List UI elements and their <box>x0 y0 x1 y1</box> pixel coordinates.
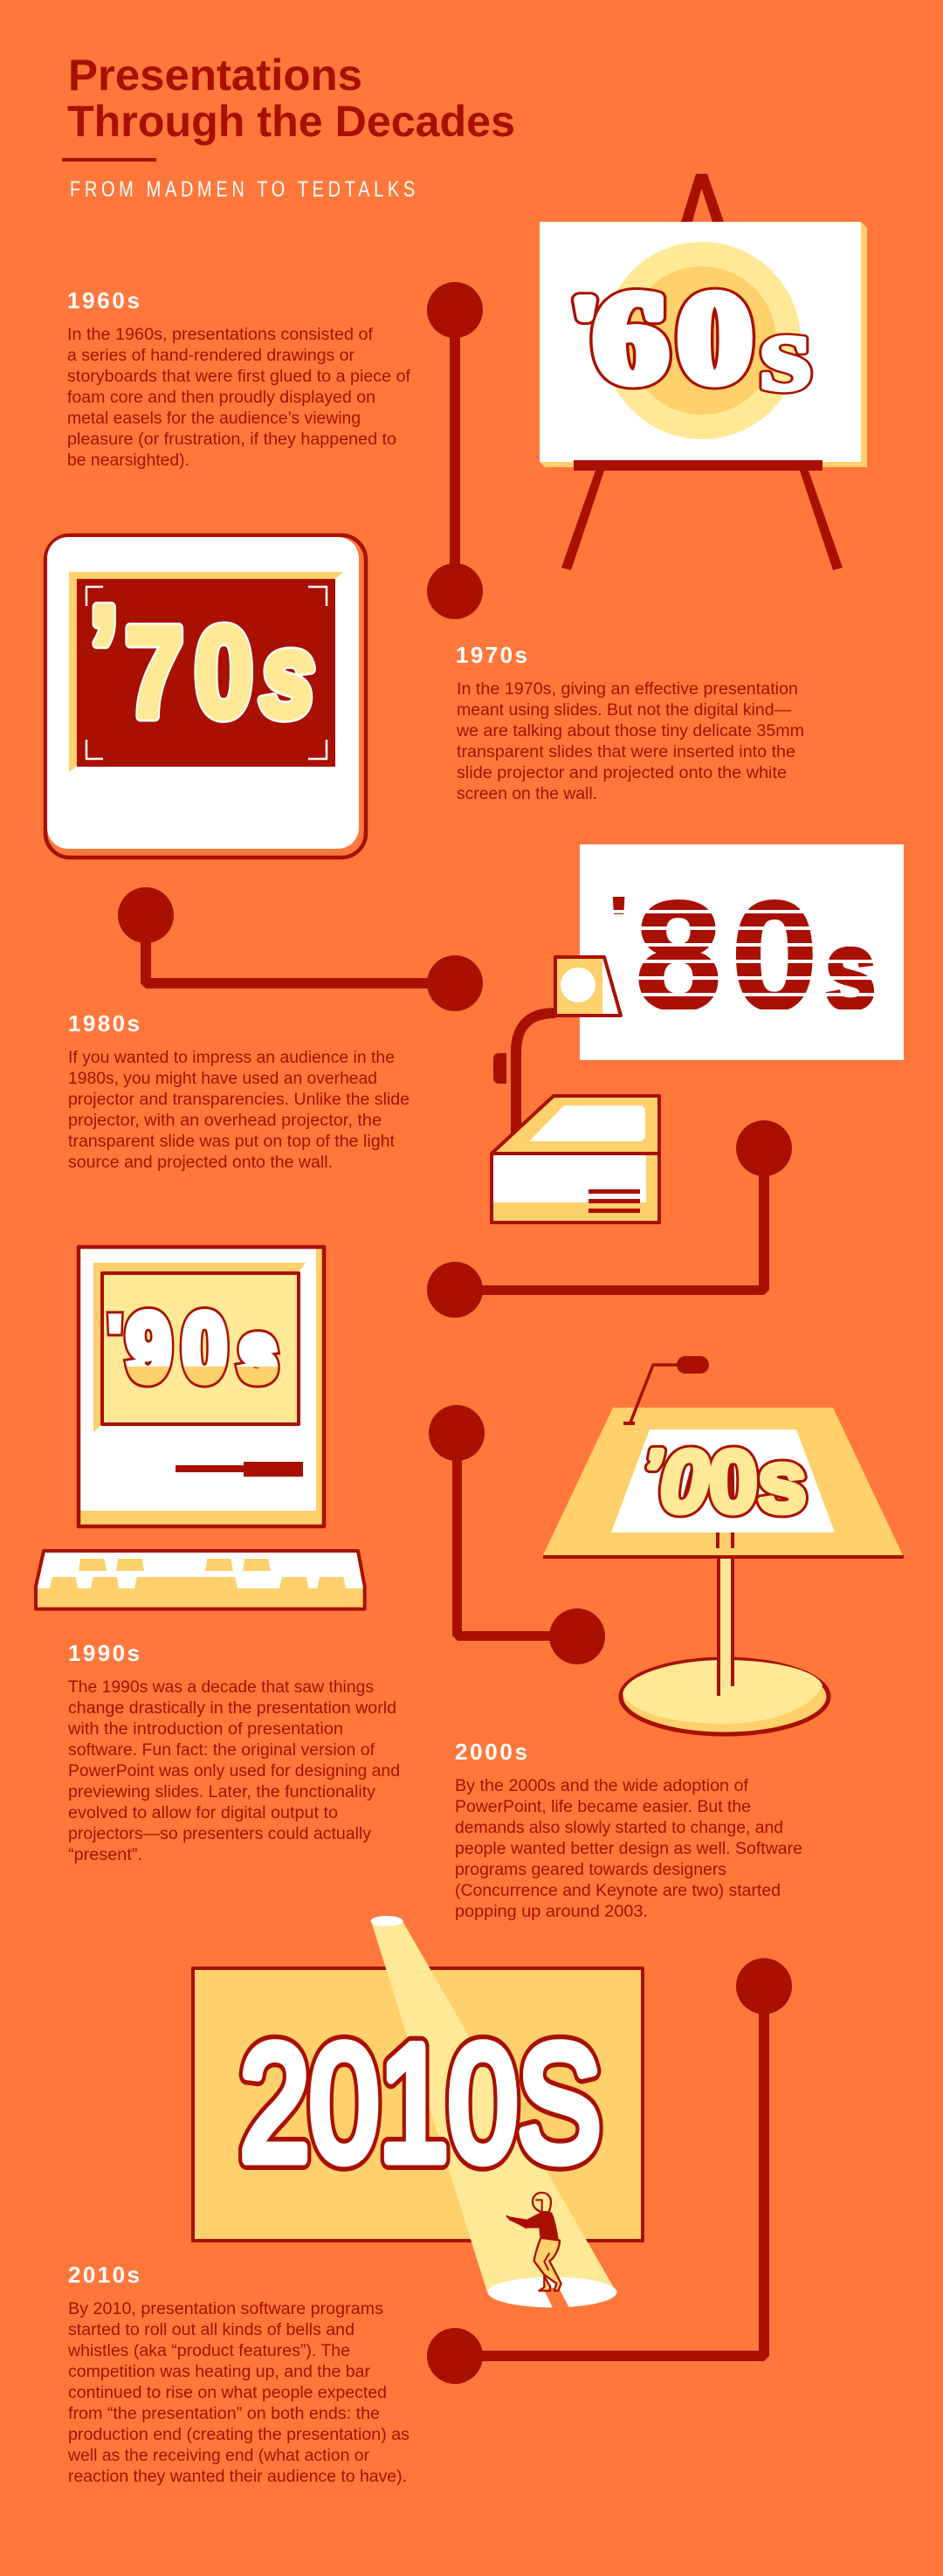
body: 1980s: projector and transparencies. Unlike the slide <box>68 1091 410 1109</box>
spotlight lamp <box>370 1916 403 1926</box>
timeline connector: 1960s to 1970s <box>427 282 483 619</box>
lettering: '90s: 9 <box>127 1296 171 1401</box>
lettering: '00s: s <box>758 1433 807 1531</box>
lettering: '60s: 0 <box>678 266 752 409</box>
body: 2000s: popping up around 2003. <box>455 1903 648 1921</box>
slide card <box>47 537 359 849</box>
timeline connector: 1980s to 1990s <box>427 1120 792 1318</box>
illustration: lectern <box>543 1356 904 1734</box>
lettering: '80s: ' <box>611 885 626 954</box>
body: 2010s <box>67 2300 410 2486</box>
heading: 1960s: 1960s <box>67 287 140 313</box>
title: Through the Decades <box>67 97 515 146</box>
body: 1990s: change drastically in the presentation world <box>68 1699 396 1718</box>
body: 2010s: started to roll out all kinds of bells and <box>68 2321 354 2339</box>
lettering: '70s: s <box>260 610 315 742</box>
lettering: '60s: 6 <box>594 266 668 409</box>
body: 2010s: reaction they wanted their audience to have). <box>68 2468 407 2486</box>
lettering: '60s: s <box>760 290 812 414</box>
lettering: '70s: ’ <box>90 581 119 723</box>
lettering: '70s: 7 <box>125 602 183 744</box>
body: 2010s: well as the receiving end (what action or <box>67 2447 370 2465</box>
easel top legs <box>681 174 724 222</box>
projected screen <box>580 844 904 1060</box>
body: 2000s: PowerPoint, life became easier. But the <box>455 1798 751 1816</box>
body: 2000s: By the 2000s and the wide adoption of <box>455 1777 749 1795</box>
body: 2000s: demands also slowly started to change, and <box>455 1819 783 1837</box>
body: 1960s: pleasure (or frustration, if they happened to <box>67 430 396 449</box>
body: 2010s: continued to rise on what people expected <box>68 2384 387 2402</box>
lettering: '60s: 6 <box>594 266 668 409</box>
projector arm <box>516 1013 555 1153</box>
spotlight pool <box>487 2277 616 2307</box>
body: 1990s: “present”. <box>68 1846 142 1864</box>
projector lid <box>492 1096 659 1154</box>
lectern pole <box>717 1559 734 1696</box>
body: 2000s: (Concurrence and Keynote are two) started <box>455 1882 781 1900</box>
title rule <box>62 158 156 162</box>
lettering: '80s: s <box>824 908 877 1033</box>
body: 1970s: we are talking about those tiny delicate 35mm <box>456 722 804 740</box>
board shadow <box>540 222 867 467</box>
body: 1990s: The 1990s was a decade that saw things <box>68 1678 374 1697</box>
illustration: easel <box>540 174 867 570</box>
body: 1970s: screen on the wall. <box>457 785 597 803</box>
easel ledge and legs <box>561 460 843 570</box>
lettering: '60s: s <box>760 290 812 414</box>
body: 1980s: 1980s, you might have used an overhead <box>68 1070 377 1088</box>
crop marks <box>86 587 327 759</box>
stage screen <box>193 1968 643 2241</box>
lettering: '00s: ’ <box>644 1438 662 1505</box>
lettering: '00s: 0 <box>709 1433 758 1531</box>
lectern lip <box>543 1555 904 1559</box>
monitor <box>79 1247 324 1526</box>
projector base <box>492 1154 659 1223</box>
heading: 2010s: 2010s <box>68 2262 140 2288</box>
heading: 1990s: 1990s <box>68 1640 140 1666</box>
section text: 2000s <box>455 1739 802 1921</box>
focus knob <box>493 1053 506 1084</box>
lettering: '00s <box>644 1433 807 1531</box>
slide frame <box>45 535 366 858</box>
body: 1960s: In the 1960s, presentations consisted of <box>67 326 374 344</box>
body: 1980s: source and projected onto the wall. <box>68 1154 333 1172</box>
keyboard <box>35 1550 365 1609</box>
lettering: 2010S: 2010S <box>240 2012 601 2195</box>
paper <box>611 1429 835 1533</box>
body: 1970s: slide projector and projected onto the white <box>457 764 787 782</box>
lettering: '00s: 0 <box>660 1433 709 1531</box>
lettering: '00s: 0 <box>709 1433 758 1531</box>
lettering: '90s: ' <box>111 1311 119 1357</box>
title <box>67 51 515 146</box>
body: 1960s: storyboards that were first glued to a piece of <box>67 368 411 386</box>
heading: 1980s: 1980s <box>68 1010 140 1037</box>
illustration: overhead projector <box>492 844 904 1223</box>
timeline connector: 1970s to 1980s <box>118 887 483 1011</box>
body: 1970s: transparent slides that were inserted into the <box>457 743 795 761</box>
body: 1960s <box>67 326 411 470</box>
film <box>77 579 335 767</box>
body: 1980s: If you wanted to impress an audience in the <box>68 1049 395 1067</box>
heading: 1970s: 1970s <box>456 642 527 668</box>
lettering: '90s <box>111 1296 277 1401</box>
lettering: '90s: ' <box>111 1311 119 1357</box>
pole behind paper <box>716 1533 734 1548</box>
body: 1980s: transparent slide was put on top of the light <box>68 1133 396 1151</box>
lettering: '80s: 0 <box>732 871 817 1042</box>
lettering: '80s: 8 <box>636 871 721 1042</box>
subtitle: FROM MADMEN TO TEDTALKS <box>70 177 415 202</box>
floppy drive slot <box>176 1462 303 1477</box>
illustration: 35mm slide <box>45 535 366 858</box>
body: 1970s <box>456 680 804 803</box>
presenter figure <box>506 2193 561 2290</box>
body: 1960s: metal easels for the audience’s viewing <box>67 410 361 428</box>
illustration: desktop computer <box>35 1247 365 1609</box>
lettering: '70s: ’ <box>90 581 119 723</box>
body: 1990s: evolved to allow for digital output to <box>68 1804 338 1822</box>
section text: 1990s <box>67 1640 400 1864</box>
body: 1970s: meant using slides. But not the digital kind— <box>457 701 791 720</box>
lettering: '70s: 0 <box>195 602 253 744</box>
lettering: '90s: 9 <box>127 1296 171 1401</box>
screen shadow <box>93 1263 306 1432</box>
body: 1960s: a series of hand-rendered drawings or <box>67 347 355 365</box>
lettering: '70s: 7 <box>125 602 183 744</box>
timeline connector: 2000s to 2010s <box>427 1958 792 2384</box>
body: 1970s: In the 1970s, giving an effective presentation <box>457 680 798 699</box>
film shadow <box>69 572 343 772</box>
timeline connector: 1990s to 2000s <box>429 1405 605 1664</box>
body: 2000s: people wanted better design as well. Software <box>455 1840 802 1858</box>
projector head <box>555 957 621 1016</box>
body: 1990s: software. Fun fact: the original version of <box>68 1741 375 1760</box>
lettering: '60s: 0 <box>678 266 752 409</box>
lettering: '70s: s <box>260 610 315 742</box>
lettering: '70s <box>90 581 315 744</box>
illustration: TED-style stage <box>193 1916 643 2308</box>
lettering: '00s: 0 <box>660 1433 709 1531</box>
body: 2010s: By 2010, presentation software programs <box>68 2300 383 2318</box>
title: Presentations <box>68 51 362 100</box>
body: 2010s: competition was heating up, and the bar <box>68 2363 371 2381</box>
microphone <box>623 1356 709 1425</box>
body: 1990s: previewing slides. Later, the functionality <box>68 1783 376 1801</box>
section text: 1970s <box>456 642 804 803</box>
body: 1990s <box>67 1678 400 1864</box>
lettering: '00s: s <box>758 1433 807 1531</box>
presenter shadow <box>543 2288 569 2308</box>
body: 2000s: programs geared towards designers <box>455 1861 726 1879</box>
lettering: '60s: ' <box>574 282 596 364</box>
lettering: '70s: 0 <box>195 602 253 744</box>
body: 2010s: whistles (aka “product features”). The <box>67 2342 350 2360</box>
body: 1990s: PowerPoint was only used for designing and <box>68 1762 400 1780</box>
lectern top <box>543 1408 903 1555</box>
body: 2010s: production end (creating the presentation) as <box>68 2426 410 2444</box>
spotlight beam <box>371 1921 616 2292</box>
body: 1960s: foam core and then proudly displayed on <box>67 389 375 407</box>
lettering: '00s: ’ <box>644 1438 662 1505</box>
lettering: '90s: s <box>239 1308 277 1398</box>
lettering: '90s: 0 <box>182 1296 227 1401</box>
lettering: '90s: s <box>239 1308 277 1398</box>
lettering: '80s <box>611 871 877 1042</box>
board <box>540 222 861 462</box>
lettering: 2010S: 2010S <box>240 2012 601 2195</box>
title block <box>62 51 515 202</box>
body: 1990s: projectors—so presenters could actually <box>68 1825 372 1843</box>
section text: 1960s <box>67 287 411 470</box>
body: 2010s: from “the presentation” on both ends: the <box>68 2405 380 2423</box>
lettering: '90s: 0 <box>182 1296 227 1401</box>
body: 1960s: be nearsighted). <box>67 451 189 470</box>
body: 2000s <box>455 1777 802 1921</box>
body: 1980s: projector, with an overhead projector, the <box>68 1112 382 1130</box>
section text: 1980s <box>68 1010 410 1172</box>
section text: 2010s <box>67 2262 410 2486</box>
screen <box>102 1273 299 1424</box>
lettering: '60s: ' <box>574 282 596 364</box>
body: 1990s: with the introduction of presentation <box>67 1720 343 1739</box>
body: 1980s <box>68 1049 410 1172</box>
sunburst circles <box>603 242 801 439</box>
lettering: '60s <box>574 266 812 414</box>
heading: 2000s: 2000s <box>455 1739 527 1765</box>
lectern base <box>621 1659 829 1734</box>
